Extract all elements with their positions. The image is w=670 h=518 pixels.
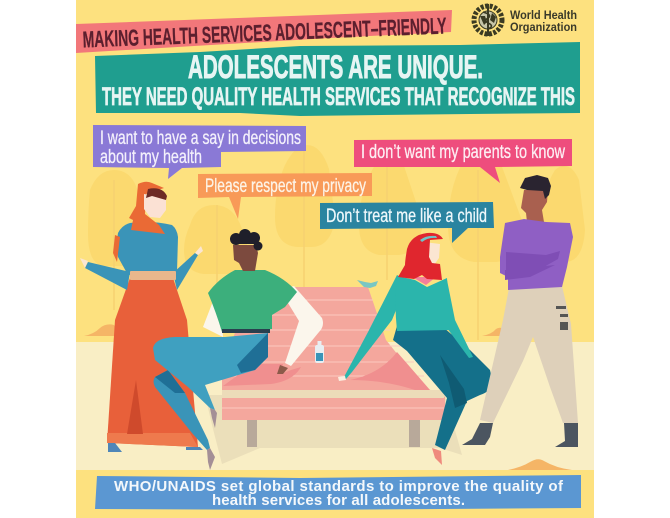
arms [85, 262, 130, 290]
scarf [129, 182, 165, 234]
shoes [462, 423, 578, 447]
crossed arms [505, 251, 560, 280]
footer text: WHO/UNAIDS set global standards to improve the quality of [114, 478, 564, 495]
skirt [107, 278, 198, 447]
speech bubble: treat me like a child: Don’t treat me like a child [326, 206, 487, 227]
bench [222, 287, 445, 447]
blue sweater [117, 222, 178, 275]
lower leg [154, 370, 210, 450]
speech bubble: parents: I don’t want my parents to know [361, 142, 565, 163]
background trees [88, 145, 585, 340]
bench legs [247, 420, 257, 447]
neck and face [233, 245, 258, 271]
footer banner [95, 475, 581, 510]
lower foot [207, 448, 215, 470]
belt [130, 271, 176, 280]
title ribbon [76, 10, 452, 53]
dark teal trousers [393, 322, 493, 450]
ground shadow under bench [205, 395, 462, 464]
hair [146, 188, 167, 200]
organization name: World Health [510, 8, 577, 22]
green shirt [208, 270, 297, 332]
face [421, 242, 440, 266]
character: man in green shirt [153, 229, 323, 470]
speech bubble: parents [354, 139, 572, 183]
bench backrest [222, 287, 405, 386]
bench seat [222, 385, 445, 420]
bench arm shadow [223, 364, 301, 386]
speech bubble: respect my privacy [198, 173, 372, 219]
red hair [398, 233, 443, 280]
curly hair [230, 229, 262, 250]
character: woman with red hair [338, 233, 493, 465]
icon: WHO emblem [474, 4, 502, 36]
belt [222, 329, 270, 333]
hair band [420, 236, 437, 242]
speech bubble: treat me like a child [320, 202, 494, 243]
neck and face [521, 190, 548, 222]
trousers [480, 286, 578, 423]
WHO logo [474, 4, 580, 36]
face [144, 194, 166, 218]
sand dunes [84, 324, 572, 470]
teal top [396, 276, 450, 331]
left arm [344, 275, 408, 379]
white undershirt left sleeve [203, 294, 223, 337]
speech bubble: respect my privacy: Please respect my privacy [205, 176, 366, 197]
character: woman with headscarf [80, 182, 203, 452]
upper leg [153, 333, 268, 410]
hair [520, 175, 551, 199]
trouser print [556, 306, 568, 330]
hand [277, 365, 288, 374]
feet [108, 443, 203, 452]
organization name: Organization [510, 20, 577, 34]
title ribbon: MAKING HEALTH SERVICES ADOLESCENT–FRIENDLY [82, 13, 447, 52]
headline banner [95, 42, 580, 116]
headline line 1: ADOLESCENTS ARE UNIQUE. [188, 49, 483, 85]
right white sleeve [280, 286, 323, 366]
speech bubble: say in decisions: I want to have a say in decisions [100, 128, 301, 149]
shoe [432, 448, 442, 465]
icon: small bird [357, 280, 378, 288]
speech bubble: say in decisions [93, 125, 306, 179]
icon: water bottle [315, 341, 324, 363]
speech bubble: say in decisions: about my health [100, 147, 202, 168]
character: man in purple sweater [462, 175, 578, 447]
footer text: health services for all adolescents. [212, 492, 465, 509]
upper foot [210, 408, 217, 428]
neckline [412, 277, 436, 285]
purple sweater [500, 219, 573, 290]
poster background [76, 0, 594, 518]
